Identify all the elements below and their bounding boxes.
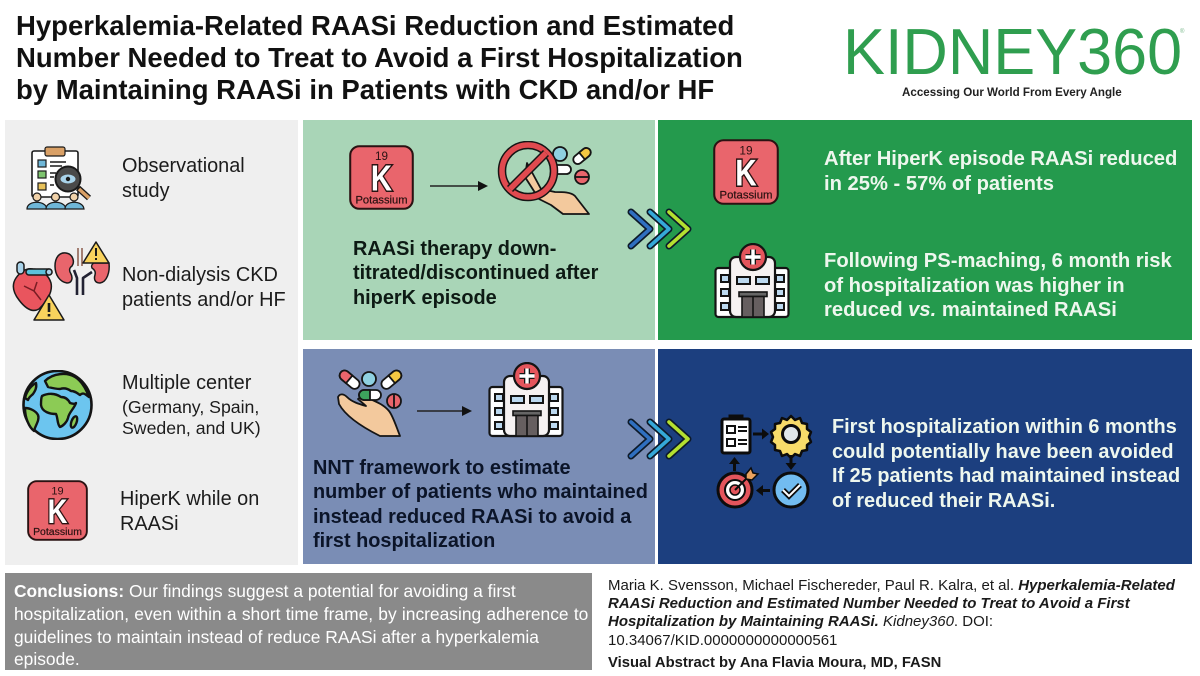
title: by Maintaining RAASi in Patients with CKD and/or HF <box>16 74 714 105</box>
text: multiple center: Sweden, and UK) <box>122 418 261 438</box>
text: conclusions: Conclusions: Our findings suggest a potential for avoiding a first <box>14 581 516 601</box>
icon: globe <box>22 370 93 440</box>
icon: potassium element: K <box>371 159 392 200</box>
text: multiple center: (Germany, Spain, <box>122 397 259 417</box>
text: hiperK: RAASi <box>120 512 179 534</box>
text: population: patients and/or HF <box>122 288 286 310</box>
panel: NNT framework <box>303 349 655 564</box>
text: conclusions <box>14 581 588 669</box>
icon: no pills hand <box>498 141 592 215</box>
arrow: bottom chevrons <box>628 418 692 460</box>
text: conclusions: episode. <box>14 649 80 669</box>
text: citation: RAASi Reduction and Estimated Number Needed to Treat to Avoid a First <box>608 595 1130 612</box>
text: hospitalization avoided <box>832 416 1180 512</box>
panel: NNT result <box>658 349 1192 564</box>
text: hiperK <box>120 488 259 534</box>
text: conclusions: guidelines to maintain instead of reduce RAASi after a hyperkalemia <box>14 627 539 647</box>
text: therapy down-titrated: hiperK episode <box>353 287 497 309</box>
arrow: top chevrons <box>628 208 692 250</box>
text: multiple center: Multiple center <box>122 372 251 394</box>
panel: therapy down-titration <box>303 120 655 340</box>
text: citation: Hospitalization by Maintaining RAASi. Kidney360. DOI: <box>608 613 993 630</box>
title <box>16 10 743 105</box>
panel: results <box>658 120 1192 340</box>
text: NNT framework: instead reduced RAASi to avoid a <box>313 506 631 528</box>
icon: heart and kidneys with warnings <box>12 241 110 321</box>
icon: hospital <box>488 362 564 438</box>
text: hiperK: HiperK while on <box>120 488 259 510</box>
icon: potassium element: Potassium <box>33 527 82 538</box>
icon: potassium element: 19 <box>375 150 388 163</box>
text: therapy down-titrated: titrated/discontinued after <box>353 262 598 284</box>
text: therapy down-titrated: RAASi therapy down- <box>353 238 556 260</box>
text: visual abstract credit: Visual Abstract by Ana Flavia Moura, MD, FASN <box>608 655 941 671</box>
title: Hyperkalemia-Related RAASi Reduction and Estimated <box>16 10 734 41</box>
text: NNT framework: NNT framework to estimate <box>313 457 571 479</box>
panel: conclusions <box>5 573 592 670</box>
text: population: Non-dialysis CKD <box>122 264 278 286</box>
text: therapy down-titrated <box>353 238 598 309</box>
text: hospitalization avoided: could potentially have been avoided <box>832 440 1174 462</box>
text: NNT framework <box>313 457 648 552</box>
icon: process cycle <box>716 414 812 508</box>
logo: Kidney360: ® <box>1180 29 1184 35</box>
panel: study design <box>5 120 298 565</box>
text: conclusions: hospitalization, even within a short time frame, by increasing adherence to <box>14 604 588 624</box>
icon: potassium element: 19 <box>51 485 64 497</box>
text: risk of hospitalization: Following PS-maching, 6 month risk <box>824 250 1172 272</box>
text: NNT framework: first hospitalization <box>313 530 495 552</box>
text: citation: 10.34067/KID.0000000000000561 <box>608 632 837 649</box>
text: hospitalization avoided: First hospitalization within 6 months <box>832 416 1177 438</box>
logo: Kidney360: Accessing Our World From Every Angle <box>902 86 1122 98</box>
icon: observational study clipboard <box>26 146 91 210</box>
text: citation: Maria K. Svensson, Michael Fischereder, Paul R. Kalra, et al. Hyperkalemia-Related <box>608 577 1175 594</box>
icon: hospital <box>714 243 790 318</box>
text: multiple center <box>122 372 261 438</box>
text: observational study: study <box>122 180 170 202</box>
text: NNT framework: number of patients who maintained <box>313 481 648 503</box>
text: risk of hospitalization <box>824 250 1172 321</box>
logo: Kidney360: KIDNEY360 <box>842 16 1182 88</box>
arrow: potassium to stop pills <box>430 181 488 191</box>
text: risk of hospitalization: of hospitalization was higher in <box>824 274 1125 296</box>
text: RAASi reduced: After HiperK episode RAASi reduced <box>824 148 1177 170</box>
text: population <box>122 264 286 310</box>
icon: potassium element <box>349 145 414 210</box>
icon: potassium element <box>713 139 779 205</box>
icon: potassium element: 19 <box>739 143 753 157</box>
icon: potassium element: Potassium <box>720 189 772 201</box>
text: RAASi reduced: in 25% - 57% of patients <box>824 172 1054 194</box>
text: hospitalization avoided: of reduced their RAASi. <box>832 490 1055 512</box>
title: Number Needed to Treat to Avoid a First Hospitalization <box>16 42 743 73</box>
text: citation <box>608 577 1176 649</box>
text: hospitalization avoided: If 25 patients had maintained instead <box>832 465 1180 487</box>
text: risk of hospitalization: reduced vs. maintained RAASi <box>824 299 1117 321</box>
icon: potassium element: K <box>735 153 757 194</box>
arrow: pills to hospital <box>417 406 472 416</box>
text: observational study: Observational <box>122 155 245 177</box>
icon: hand with pills <box>337 370 402 437</box>
text: observational study <box>122 155 245 202</box>
text: RAASi reduced <box>824 148 1177 194</box>
icon: potassium element: K <box>48 492 68 531</box>
icon: potassium element <box>27 480 88 541</box>
icon: potassium element: Potassium <box>355 194 408 206</box>
